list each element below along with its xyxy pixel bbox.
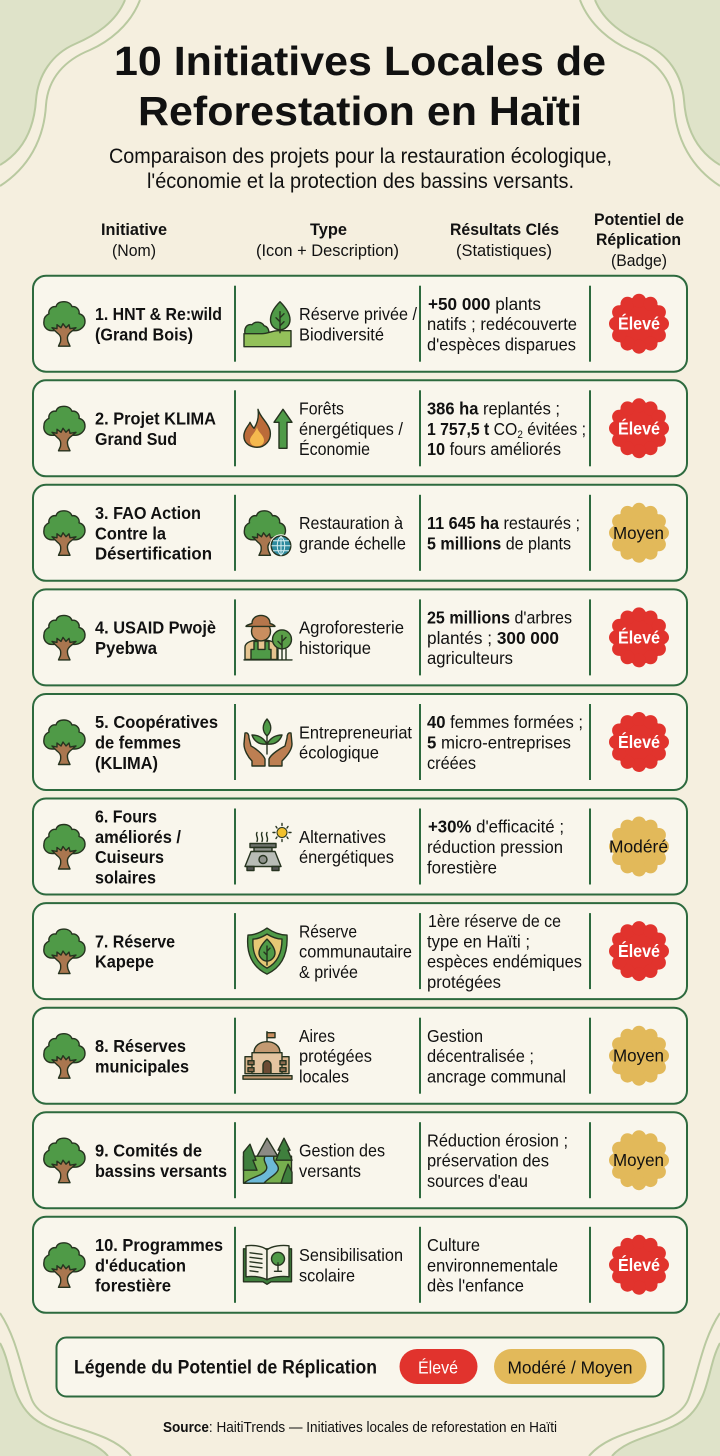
key results — [427, 1026, 566, 1086]
badge: Élevé — [609, 294, 669, 354]
icon: tree — [44, 302, 85, 346]
card frame — [33, 380, 687, 476]
initiative name: améliorés / — [95, 827, 181, 847]
icon: landscape with leaf tree — [244, 302, 291, 347]
decorative corner: bottom left — [0, 1313, 131, 1456]
icon: tree — [44, 720, 85, 764]
type description: & privée — [299, 962, 358, 982]
key results: 25 millions d'arbres — [427, 608, 572, 628]
type description: Économie — [299, 439, 370, 459]
badge: Élevé: Élevé — [618, 1254, 660, 1275]
icon: hands holding sprout — [244, 719, 292, 766]
type description — [299, 398, 403, 459]
source line: Source: HaitiTrends — Initiatives locales de reforestation en Haïti — [163, 1419, 557, 1436]
key results: natifs ; redécouverte — [427, 314, 577, 334]
key results: Culture — [427, 1235, 480, 1255]
key results: plantés ; 300 000 — [427, 628, 559, 648]
initiative name: d'éducation — [95, 1255, 186, 1275]
row 5: Coopératives de femmes (KLIMA) — [33, 694, 687, 790]
initiative name: 6. Fours — [95, 806, 157, 826]
key results — [427, 513, 580, 553]
badge: Moyen — [609, 1130, 669, 1190]
type description: Entrepreneuriat — [299, 722, 412, 742]
key results: Gestion — [427, 1026, 483, 1046]
key results: espèces endémiques — [427, 952, 582, 972]
initiative name: (Grand Bois) — [95, 324, 193, 344]
key results — [427, 608, 572, 668]
type description: Restauration à — [299, 513, 403, 533]
column header: type: Type — [310, 220, 347, 239]
column header: replication potential: Potentiel de — [594, 210, 684, 229]
initiative name: forestière — [95, 1276, 171, 1296]
badge: Élevé: Élevé — [618, 417, 660, 438]
initiative name: 5. Coopératives — [95, 712, 218, 732]
badge: Moyen: Moyen — [613, 1046, 664, 1066]
badge: Modéré — [609, 816, 669, 876]
type description — [299, 304, 417, 344]
key results — [427, 1130, 568, 1191]
type description: Aires — [299, 1026, 335, 1046]
type description: énergétiques — [299, 847, 394, 867]
badge: Modéré: Modéré — [609, 836, 668, 856]
badge: Élevé: Élevé — [618, 940, 660, 961]
initiative name — [95, 304, 222, 344]
icon: tree — [44, 824, 85, 869]
key results: 1 757,5 t CO — [427, 419, 520, 439]
column header: results: (Statistiques) — [456, 241, 552, 260]
initiative name: 9. Comités de — [95, 1140, 202, 1160]
icon: tree — [44, 1243, 85, 1287]
key results: dès l'enfance — [427, 1276, 524, 1296]
card frame — [33, 798, 687, 894]
card frame — [33, 1112, 687, 1208]
card frame — [33, 276, 687, 372]
initiative name — [95, 409, 216, 449]
legend pill: Élevé: Élevé — [418, 1358, 458, 1378]
key results: sources d'eau — [427, 1171, 528, 1191]
initiative name: Cuiseurs — [95, 847, 164, 867]
type description: Réserve — [299, 921, 357, 941]
initiative name: Contre la — [95, 523, 166, 543]
type description — [299, 1140, 385, 1181]
icon: tree with globe — [244, 511, 292, 557]
key results: ancrage communal — [427, 1067, 566, 1087]
key results: 5 micro-entreprises — [427, 732, 571, 752]
icon: shield with leaf — [248, 928, 287, 974]
badge: Élevé — [609, 398, 669, 458]
decorative corner: top right — [580, 0, 720, 186]
key results — [427, 398, 586, 459]
row 7: Réserve Kapepe — [33, 903, 687, 999]
type description — [299, 827, 394, 867]
initiative name: Pyebwa — [95, 638, 157, 658]
row 3: FAO Action Contre la Désertification — [33, 485, 687, 581]
initiative name: solaires — [95, 867, 156, 887]
legend pill: Modéré / Moyen: Modéré / Moyen — [508, 1358, 632, 1378]
type description — [299, 921, 412, 982]
initiative name: de femmes — [95, 732, 181, 752]
initiative name: 8. Réserves — [95, 1036, 186, 1056]
row 2: Projet KLIMA Grand Sud — [33, 380, 687, 476]
type description — [299, 513, 406, 553]
key results: évitées ; — [523, 419, 586, 439]
key results — [427, 911, 582, 992]
type description: Sensibilisation — [299, 1245, 403, 1265]
row 4: USAID Pwojè Pyebwa — [33, 589, 687, 685]
key results — [427, 1235, 558, 1296]
card frame — [33, 589, 687, 685]
column header: initiative: Initiative — [101, 220, 167, 239]
icon: tree — [44, 1138, 85, 1183]
key results: préservation des — [427, 1151, 549, 1171]
card frame — [33, 1217, 687, 1313]
decorative corner: top left — [0, 0, 140, 186]
initiative name: Désertification — [95, 544, 212, 564]
icon: tree — [44, 929, 85, 974]
type description: communautaire — [299, 942, 412, 962]
type description: Biodiversité — [299, 324, 384, 344]
icon: tree — [44, 511, 85, 555]
key results: 10 fours améliorés — [427, 439, 561, 459]
badge: Moyen — [609, 1026, 669, 1086]
legend panel — [56, 1338, 664, 1396]
type description: Agroforesterie — [299, 618, 404, 638]
type description — [299, 1026, 372, 1086]
key results: décentralisée ; — [427, 1046, 534, 1066]
badge: Élevé — [609, 921, 669, 981]
row 6: Fours améliorés / Cuiseurs solaires — [33, 798, 687, 894]
key results: 1ère réserve de ce — [428, 911, 561, 931]
column header: initiative — [101, 220, 167, 260]
type description: versants — [299, 1161, 361, 1181]
subtitle — [109, 144, 612, 193]
initiative name — [95, 712, 218, 773]
key results: 386 ha replantés ; — [427, 398, 560, 418]
icon: tree — [44, 406, 85, 451]
key results — [427, 712, 583, 773]
initiative name: 3. FAO Action — [95, 503, 201, 523]
type description — [299, 618, 404, 658]
initiative name — [95, 931, 175, 972]
key results: réduction pression — [427, 837, 563, 857]
key results: 40 femmes formées ; — [427, 712, 583, 732]
initiative name: 1. HNT & Re:wild — [95, 304, 222, 324]
title — [114, 38, 606, 134]
key results: protégées — [427, 972, 501, 992]
initiative name — [95, 1140, 227, 1181]
type description: énergétiques / — [299, 419, 403, 439]
key results: créées — [427, 753, 476, 773]
initiative name: municipales — [95, 1056, 189, 1076]
initiative name — [95, 1235, 223, 1296]
key results — [427, 817, 564, 877]
icon: tree — [44, 1034, 85, 1078]
initiative name: 10. Programmes — [95, 1235, 223, 1255]
legend pill: Élevé — [400, 1349, 478, 1384]
key results: 2 — [517, 429, 523, 441]
icon: watershed landscape — [244, 1138, 292, 1183]
legend pill: Modéré / Moyen — [494, 1349, 646, 1384]
icon: tree — [44, 615, 85, 660]
key results: forestière — [427, 857, 497, 877]
badge: Moyen: Moyen — [613, 1150, 664, 1170]
decorative corner: bottom right — [589, 1313, 720, 1456]
key results: +30% d'efficacité ; — [428, 817, 564, 837]
column header: type: (Icon + Description) — [256, 241, 399, 260]
initiative name — [95, 503, 212, 564]
key results: Réduction érosion ; — [427, 1130, 568, 1150]
type description: Forêts — [299, 398, 344, 418]
initiative name: 4. USAID Pwojè — [95, 618, 216, 638]
initiative name: 7. Réserve — [95, 931, 175, 951]
type description: écologique — [299, 743, 379, 763]
type description: historique — [299, 638, 371, 658]
title: 10 Initiatives Locales de — [114, 38, 606, 84]
card frame — [33, 1008, 687, 1104]
initiative name: 2. Projet KLIMA — [95, 409, 216, 429]
row 10: Programmes d'éducation forestière — [33, 1217, 687, 1313]
row 8: Réserves municipales — [33, 1008, 687, 1104]
row 1: HNT & Re:wild — [33, 276, 687, 372]
icon: stove with steam and sun — [245, 824, 291, 870]
type description: Gestion des — [299, 1140, 385, 1160]
badge: Élevé: Élevé — [618, 626, 660, 647]
icon: flame and up arrow — [244, 409, 292, 448]
row 9: Comités de bassins versants — [33, 1112, 687, 1208]
initiative name: Kapepe — [95, 952, 154, 972]
column header: initiative: (Nom) — [112, 241, 156, 260]
title: Reforestation en Haïti — [138, 88, 582, 134]
column header: type — [256, 220, 399, 260]
column header: replication potential: (Badge) — [611, 251, 667, 270]
legend heading: Légende du Potentiel de Réplication — [74, 1358, 377, 1378]
key results: d'espèces disparues — [427, 335, 576, 355]
key results: +50 000 plants — [428, 294, 541, 314]
icon: open book with tree — [244, 1245, 292, 1284]
initiative name — [95, 1036, 189, 1076]
column header: replication potential: Réplication — [596, 230, 681, 249]
badge: Élevé — [609, 1235, 669, 1295]
type description — [299, 722, 412, 763]
type description: protégées — [299, 1046, 372, 1066]
card frame — [33, 694, 687, 790]
badge: Élevé — [609, 712, 669, 772]
badge: Moyen — [609, 503, 669, 563]
card frame — [33, 485, 687, 581]
column header: results: Résultats Clés — [450, 220, 559, 239]
subtitle: l'économie et la protection des bassins versants. — [147, 169, 574, 193]
column header: replication potential — [594, 210, 684, 270]
type description: grande échelle — [299, 533, 406, 553]
legend frame — [56, 1338, 664, 1396]
key results: type en Haïti ; — [427, 931, 530, 951]
type description: Alternatives — [299, 827, 386, 847]
type description — [299, 1245, 403, 1285]
key results: agriculteurs — [427, 648, 513, 668]
badge: Élevé: Élevé — [618, 313, 660, 334]
type description: Réserve privée / — [299, 304, 417, 324]
icon: municipal building — [243, 1032, 292, 1079]
key results — [427, 294, 577, 354]
initiative name — [95, 806, 181, 887]
subtitle: Comparaison des projets pour la restauration écologique, — [109, 144, 612, 168]
card frame — [33, 903, 687, 999]
column header: results — [450, 220, 559, 260]
badge: Moyen: Moyen — [613, 523, 664, 543]
type description: scolaire — [299, 1265, 355, 1285]
key results: 11 645 ha restaurés ; — [427, 513, 580, 533]
badge: Élevé: Élevé — [618, 731, 660, 752]
icon: farmer with small tree — [244, 615, 292, 660]
initiative name: bassins versants — [95, 1161, 227, 1181]
initiative name: (KLIMA) — [95, 753, 158, 773]
type description: locales — [299, 1067, 349, 1087]
key results: environnementale — [427, 1255, 558, 1275]
badge: Élevé — [609, 607, 669, 667]
key results: 5 millions de plants — [427, 533, 571, 553]
initiative name — [95, 618, 216, 658]
initiative name: Grand Sud — [95, 429, 177, 449]
